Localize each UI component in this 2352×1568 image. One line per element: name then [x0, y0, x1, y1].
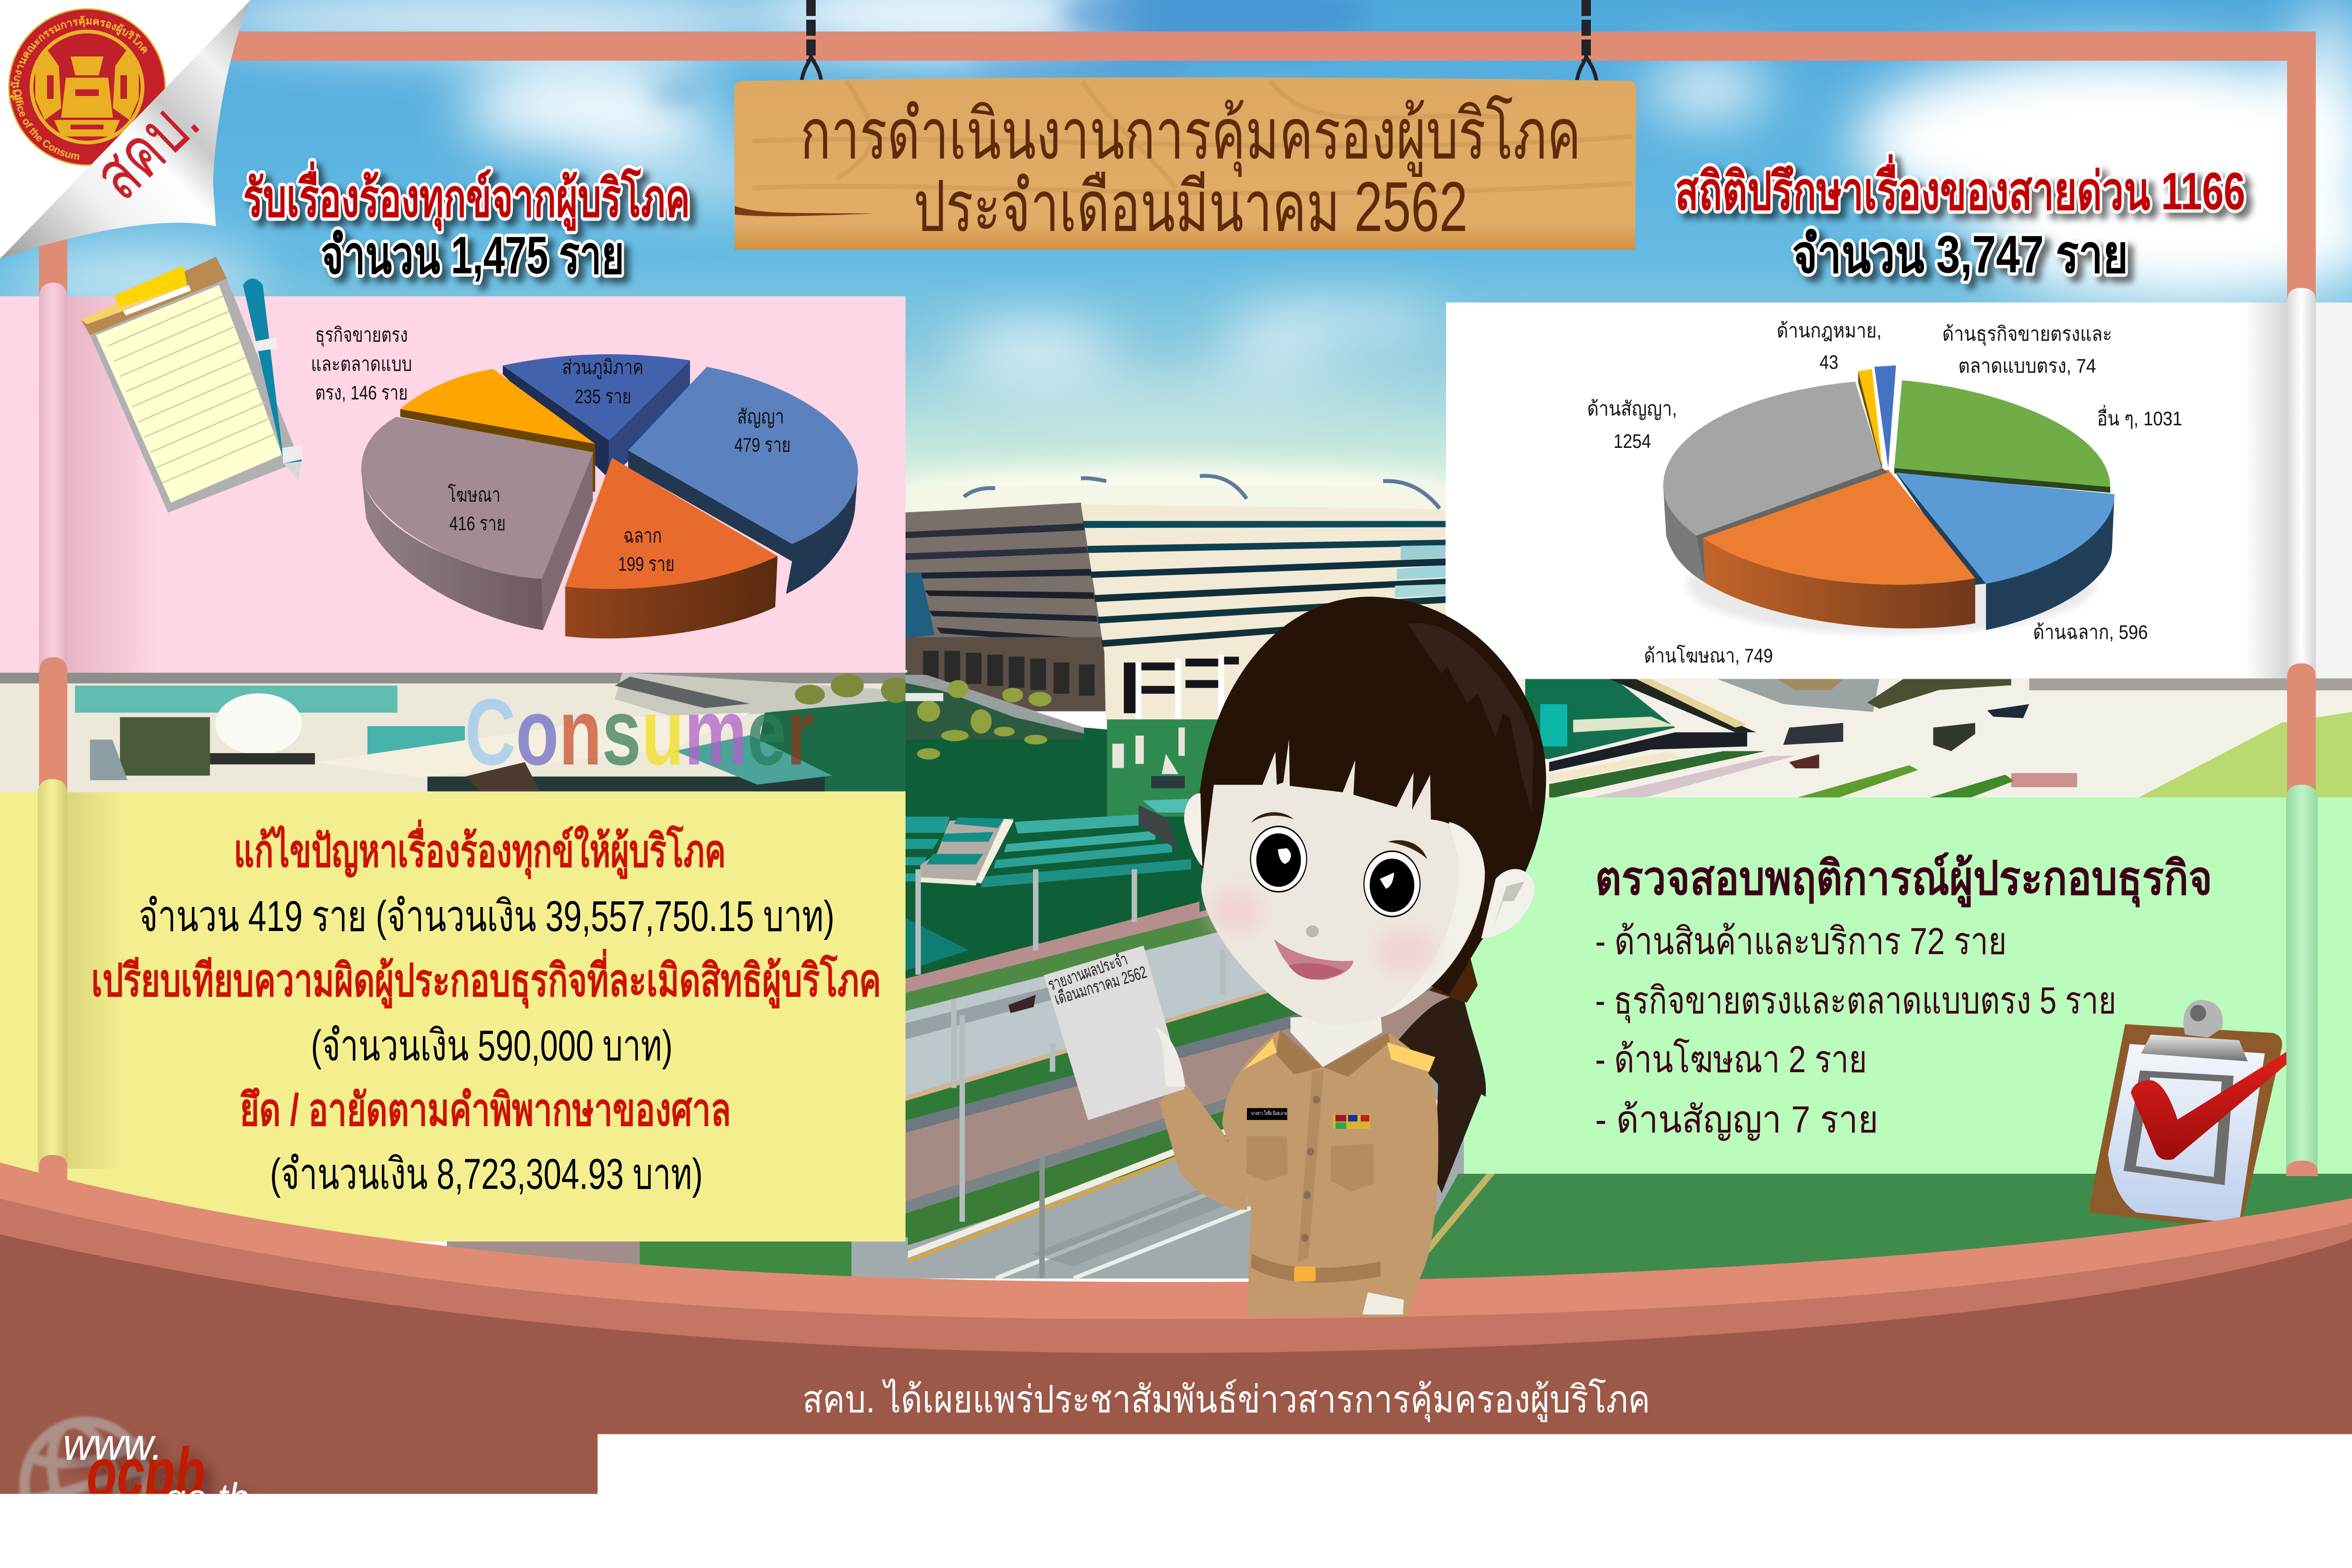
pie labels: complaints: 416 ราย: [449, 512, 506, 534]
report paper in hand: นางสาว ใจซื่อ มือสะอาด: [1251, 1109, 1287, 1116]
text block: complaint results: ยึด / อายัดตามคำพิพากษาของศาล: [240, 1085, 731, 1135]
pie labels: complaints: ฉลาก: [623, 525, 662, 547]
hair back: [1198, 597, 1546, 995]
icon: notepad and pen: [81, 257, 303, 513]
hotline badge 1166: สคบ.: [2249, 1449, 2329, 1494]
pie labels: hotline: ด้านธุรกิจขายตรงและ: [1942, 323, 2112, 346]
hanging chains: [802, 0, 1597, 81]
heading: complaints received: จำนวน 1,475 ราย: [321, 226, 624, 285]
report paper in hand: เดือนมกราคม 2562: [1052, 962, 1149, 1009]
blush: [1209, 891, 1436, 971]
logo: globe with website address: .go.th: [154, 1475, 249, 1523]
pie labels: hotline: อื่น ๆ, 1031: [2097, 405, 2182, 430]
pie labels: complaints: 199 ราย: [618, 553, 675, 575]
text block: business inspection: [1595, 852, 2212, 1141]
pink panel scroll roll: [39, 283, 67, 673]
text block: business inspection: - ด้านสัญญา 7 ราย: [1595, 1098, 1878, 1141]
sign title text: ประจำเดือนมีนาคม 2562: [914, 167, 1468, 246]
word art: Consumer: Consumer: [465, 680, 814, 785]
corner page curl with office abbreviation: [0, 0, 251, 259]
green panel scroll roll: [2286, 785, 2318, 1174]
panel: yellow complaint results: [0, 779, 906, 1242]
frame: salmon bar and posts: [39, 32, 2316, 1175]
pie labels: hotline: ด้านกฎหมาย,: [1777, 319, 1882, 342]
icon: clipboard with red check: [2090, 1000, 2287, 1230]
text block: complaint results: (จำนวนเงิน 8,723,304.93 บาท): [270, 1150, 703, 1198]
pie labels: hotline: 1254: [1613, 430, 1651, 452]
logo: globe with website address: www.: [63, 1419, 163, 1470]
footer text: สคบ. ได้เผยแพร่ประชาสัมพันธ์ข่าวสารการคุ้มครองผู้บริโภค: [803, 1378, 1650, 1422]
icon: red telephone: [2061, 1452, 2134, 1543]
uniform: [1222, 1030, 1438, 1317]
report paper in hand: [1044, 946, 1287, 1120]
corner: seal of the consumer protection office: [0, 0, 251, 259]
heading: complaints received: รับเรื่องร้องทุกข์จากผู้บริโภค: [243, 161, 690, 231]
pie chart: complaints by category: [311, 324, 858, 638]
background photo: pavement beneath yellow panel: [447, 1237, 908, 1294]
hotline badge 1166: [2123, 1449, 2329, 1542]
pie labels: hotline: ด้านฉลาก, 596: [2033, 621, 2148, 643]
logo: globe with website address: ocpb: [87, 1433, 205, 1512]
decorative band: middle arc: [0, 1199, 2352, 1568]
pie labels: complaints: [311, 324, 791, 575]
background photo: lakeside gardens, stairs and road: [906, 673, 1472, 1278]
wooden title sign: [734, 77, 1637, 250]
left ear: [1184, 793, 1202, 867]
background photo: building: [906, 476, 1447, 750]
ponytail: [1398, 958, 1486, 1193]
panel: pink complaints chart: [0, 283, 906, 673]
pie labels: hotline: [1587, 319, 2182, 667]
pie labels: hotline: ตลาดแบบตรง, 74: [1958, 355, 2096, 377]
report paper in hand: รายงานผลประจำ: [1045, 949, 1130, 995]
character: officer holding report: [1159, 597, 1546, 1317]
footer band: dark arc: [0, 1234, 2352, 1568]
heading: complaints received: [243, 161, 690, 285]
pie labels: complaints: ตรง, 146 ราย: [315, 382, 408, 404]
face: [1201, 739, 1485, 1025]
corner page curl with office abbreviation: สคบ.: [79, 80, 213, 214]
post caps over top panels: [39, 657, 2316, 800]
sign title text: การดำเนินงานการคุ้มครองผู้บริโภค: [800, 95, 1581, 177]
background photo: left gardens strip: [0, 670, 911, 796]
pie chart: hotline consultations: [1587, 319, 2182, 667]
text block: business inspection: - ด้านโฆษณา 2 ราย: [1595, 1038, 1867, 1080]
yellow panel scroll roll: [38, 779, 67, 1176]
panel: green business inspection: [1464, 785, 2352, 1176]
footer text: รวมทั้งการให้ความรู้ในงานสัมมนาต่างๆ จำนวน 973 ครั้ง ในเดือนมีนาคม 2562 ที่ผ่านมา: [593, 1490, 1860, 1540]
nose: [1306, 925, 1319, 937]
footer text: [593, 1378, 1860, 1540]
hotline badge 1166: 1: [2187, 1489, 2213, 1542]
heading: hotline statistics: [1675, 154, 2245, 284]
hotline badge 1166: 6: [2293, 1489, 2319, 1542]
white panel scroll roll: [2287, 288, 2316, 678]
pie labels: complaints: ส่วนภูมิภาค: [562, 356, 644, 379]
pie labels: complaints: 479 ราย: [734, 434, 791, 456]
background photo: sky and clouds: [0, 0, 2352, 517]
text block: business inspection: ตรวจสอบพฤติการณ์ผู้ประกอบธุรกิจ: [1595, 852, 2212, 907]
pie labels: complaints: สัญญา: [737, 406, 784, 428]
eyes: [1250, 827, 1420, 916]
text block: complaint results: เปรียบเทียบความผิดผู้ประกอบธุรกิจที่ละเมิดสิทธิผู้บริโภค: [91, 948, 881, 1009]
footer text: ทางโซเชียล เว็บไซต์ และ Facebook สคบ. เอกสารเผยแพร่แผ่นพับและคู่มือต่างๆ: [641, 1436, 1797, 1481]
hotline badge 1166: 6: [2240, 1489, 2266, 1542]
decorative band: salmon arc: [0, 1162, 2352, 1568]
neck: [1290, 1012, 1383, 1067]
sign title text: [800, 95, 1581, 246]
text block: complaint results: จำนวน 419 ราย (จำนวนเงิน 39,557,750.15 บาท): [139, 892, 834, 940]
text block: business inspection: - ธุรกิจขายตรงและตลาดแบบตรง 5 ราย: [1595, 979, 2116, 1023]
eyebrows: [1251, 812, 1427, 859]
pie labels: hotline: 43: [1820, 351, 1838, 373]
panel: white hotline chart: [1446, 288, 2352, 678]
background photo: lawn: [1378, 1174, 2352, 1317]
pie labels: complaints: และตลาดแบบ: [311, 353, 412, 375]
pie labels: complaints: 235 ราย: [575, 385, 631, 407]
text block: business inspection: - ด้านสินค้าและบริการ 72 ราย: [1595, 920, 2007, 962]
right ear: [1481, 869, 1534, 938]
background photo: right garden strip: [1441, 678, 2352, 799]
pie labels: hotline: ด้านโฆษณา, 749: [1644, 644, 1773, 667]
pie labels: complaints: ธุรกิจขายตรง: [315, 324, 408, 347]
heading: hotline statistics: จำนวน 3,747 ราย: [1792, 225, 2128, 284]
pie labels: complaints: โฆษณา: [448, 483, 501, 506]
text block: complaint results: แก้ไขปัญหาเรื่องร้องทุกข์ให้ผู้บริโภค: [234, 819, 726, 879]
hotline badge 1166: 1: [2133, 1489, 2160, 1542]
logo: globe with website address: [23, 1416, 249, 1554]
corner: seal of the consumer protection office: สำนักงานคณะกรรมการคุ้มครองผู้บริโภค: [9, 15, 151, 102]
mouth: [1274, 939, 1353, 980]
pie labels: hotline: ด้านสัญญา,: [1587, 398, 1677, 420]
arm: [1159, 1079, 1248, 1210]
text block: complaint results: [91, 819, 881, 1198]
text block: complaint results: (จำนวนเงิน 590,000 บาท): [311, 1022, 673, 1070]
